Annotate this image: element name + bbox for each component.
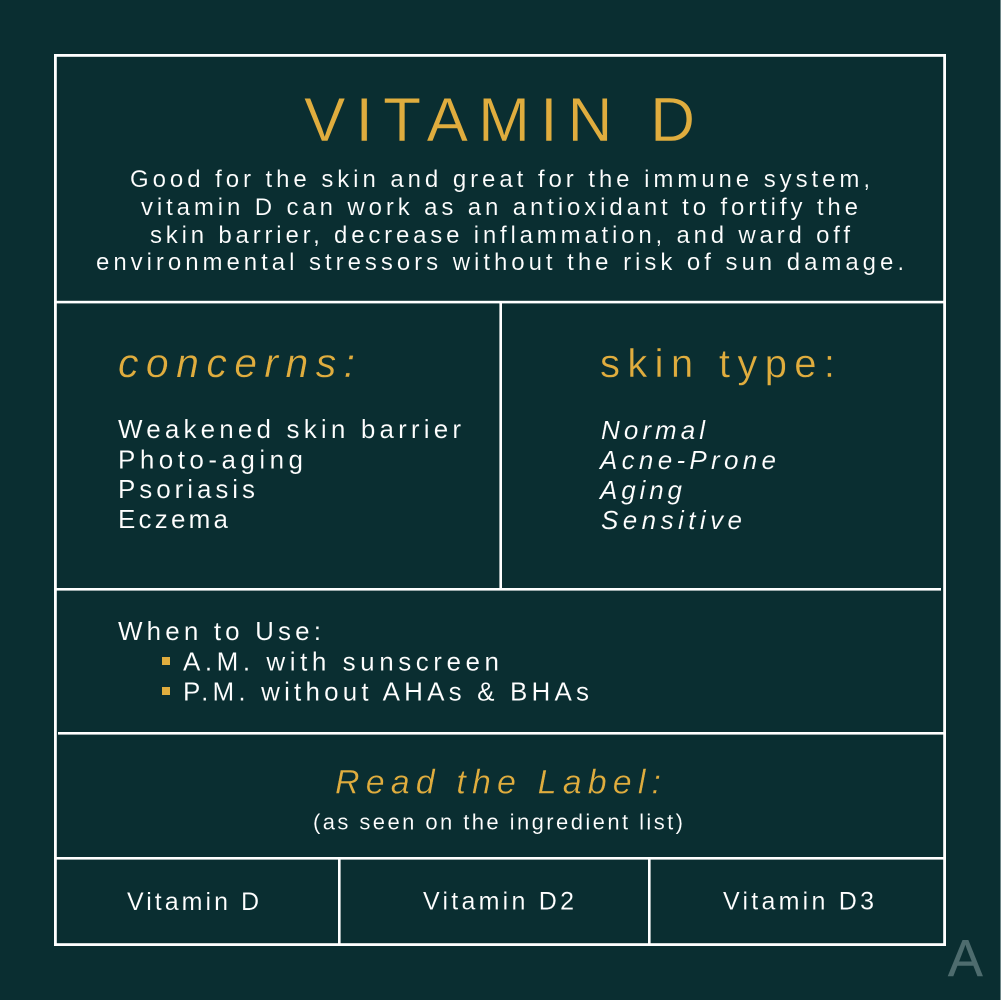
concerns list xyxy=(118,414,461,534)
intro paragraph: environmental stressors without the risk of sun damage. xyxy=(96,249,904,276)
logo mark: A xyxy=(948,930,983,988)
concerns list: Photo-aging xyxy=(118,444,303,474)
panel: concerns xyxy=(118,340,461,534)
concerns list: Eczema xyxy=(118,504,229,534)
ingredient: Vitamin D: Vitamin D xyxy=(127,888,259,916)
title: VITAMIN D xyxy=(304,86,695,155)
panel: skin type xyxy=(598,342,835,535)
bullet: A.M.: A.M. with sunscreen xyxy=(183,646,499,676)
panel: read the label xyxy=(313,764,683,834)
intro paragraph: skin barrier, decrease inflammation, and ward off xyxy=(150,222,850,249)
skin type list: Sensitive xyxy=(601,505,742,535)
ingredient: Vitamin D3: Vitamin D3 xyxy=(723,888,874,916)
concerns list: Psoriasis xyxy=(118,474,255,504)
intro paragraph xyxy=(96,166,904,276)
panel: ingredient names xyxy=(127,888,874,916)
intro paragraph: vitamin D can work as an antioxidant to fortify the xyxy=(141,194,858,221)
ingredient: Vitamin D2: Vitamin D2 xyxy=(423,888,574,916)
concerns heading: concerns: xyxy=(118,340,355,386)
ingredient list note: (as seen on the ingredient list) xyxy=(313,810,683,834)
skin type list: Aging xyxy=(598,475,683,505)
outer frame and dividers xyxy=(54,54,946,946)
skin type heading: skin type: xyxy=(600,342,835,386)
concerns list: Weakened skin barrier xyxy=(118,414,461,444)
skin type list: Normal xyxy=(601,415,706,445)
skin type list: Acne-Prone xyxy=(598,445,776,475)
skin type list xyxy=(598,415,776,535)
intro paragraph: Good for the skin and great for the immune system, xyxy=(130,166,870,193)
read the label heading: Read the Label: xyxy=(335,764,661,802)
panel: when to use xyxy=(118,616,589,706)
when to use heading: When to Use: xyxy=(118,616,321,646)
panel: header xyxy=(96,86,904,276)
bullet: P.M.: P.M. without AHAs & BHAs xyxy=(183,676,589,706)
